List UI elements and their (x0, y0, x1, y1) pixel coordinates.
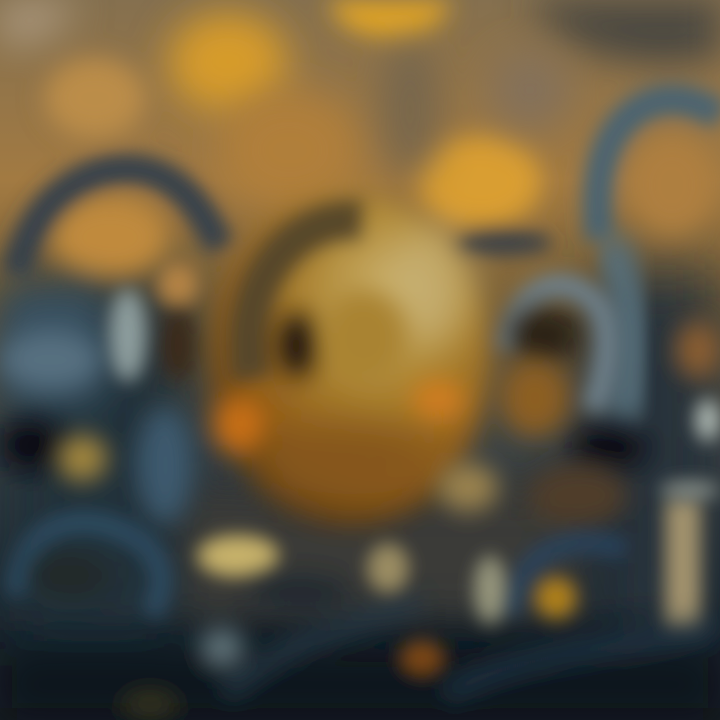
bokeh lights (0, 0, 720, 228)
right blue padlock (597, 100, 720, 630)
small padlock right of center (438, 230, 646, 527)
left blue padlock (0, 169, 220, 523)
center golden padlock (210, 195, 490, 525)
shackle of golden padlock (248, 220, 362, 380)
dark masses behind padlocks (0, 270, 720, 650)
foreground dark padlocks (0, 523, 720, 720)
